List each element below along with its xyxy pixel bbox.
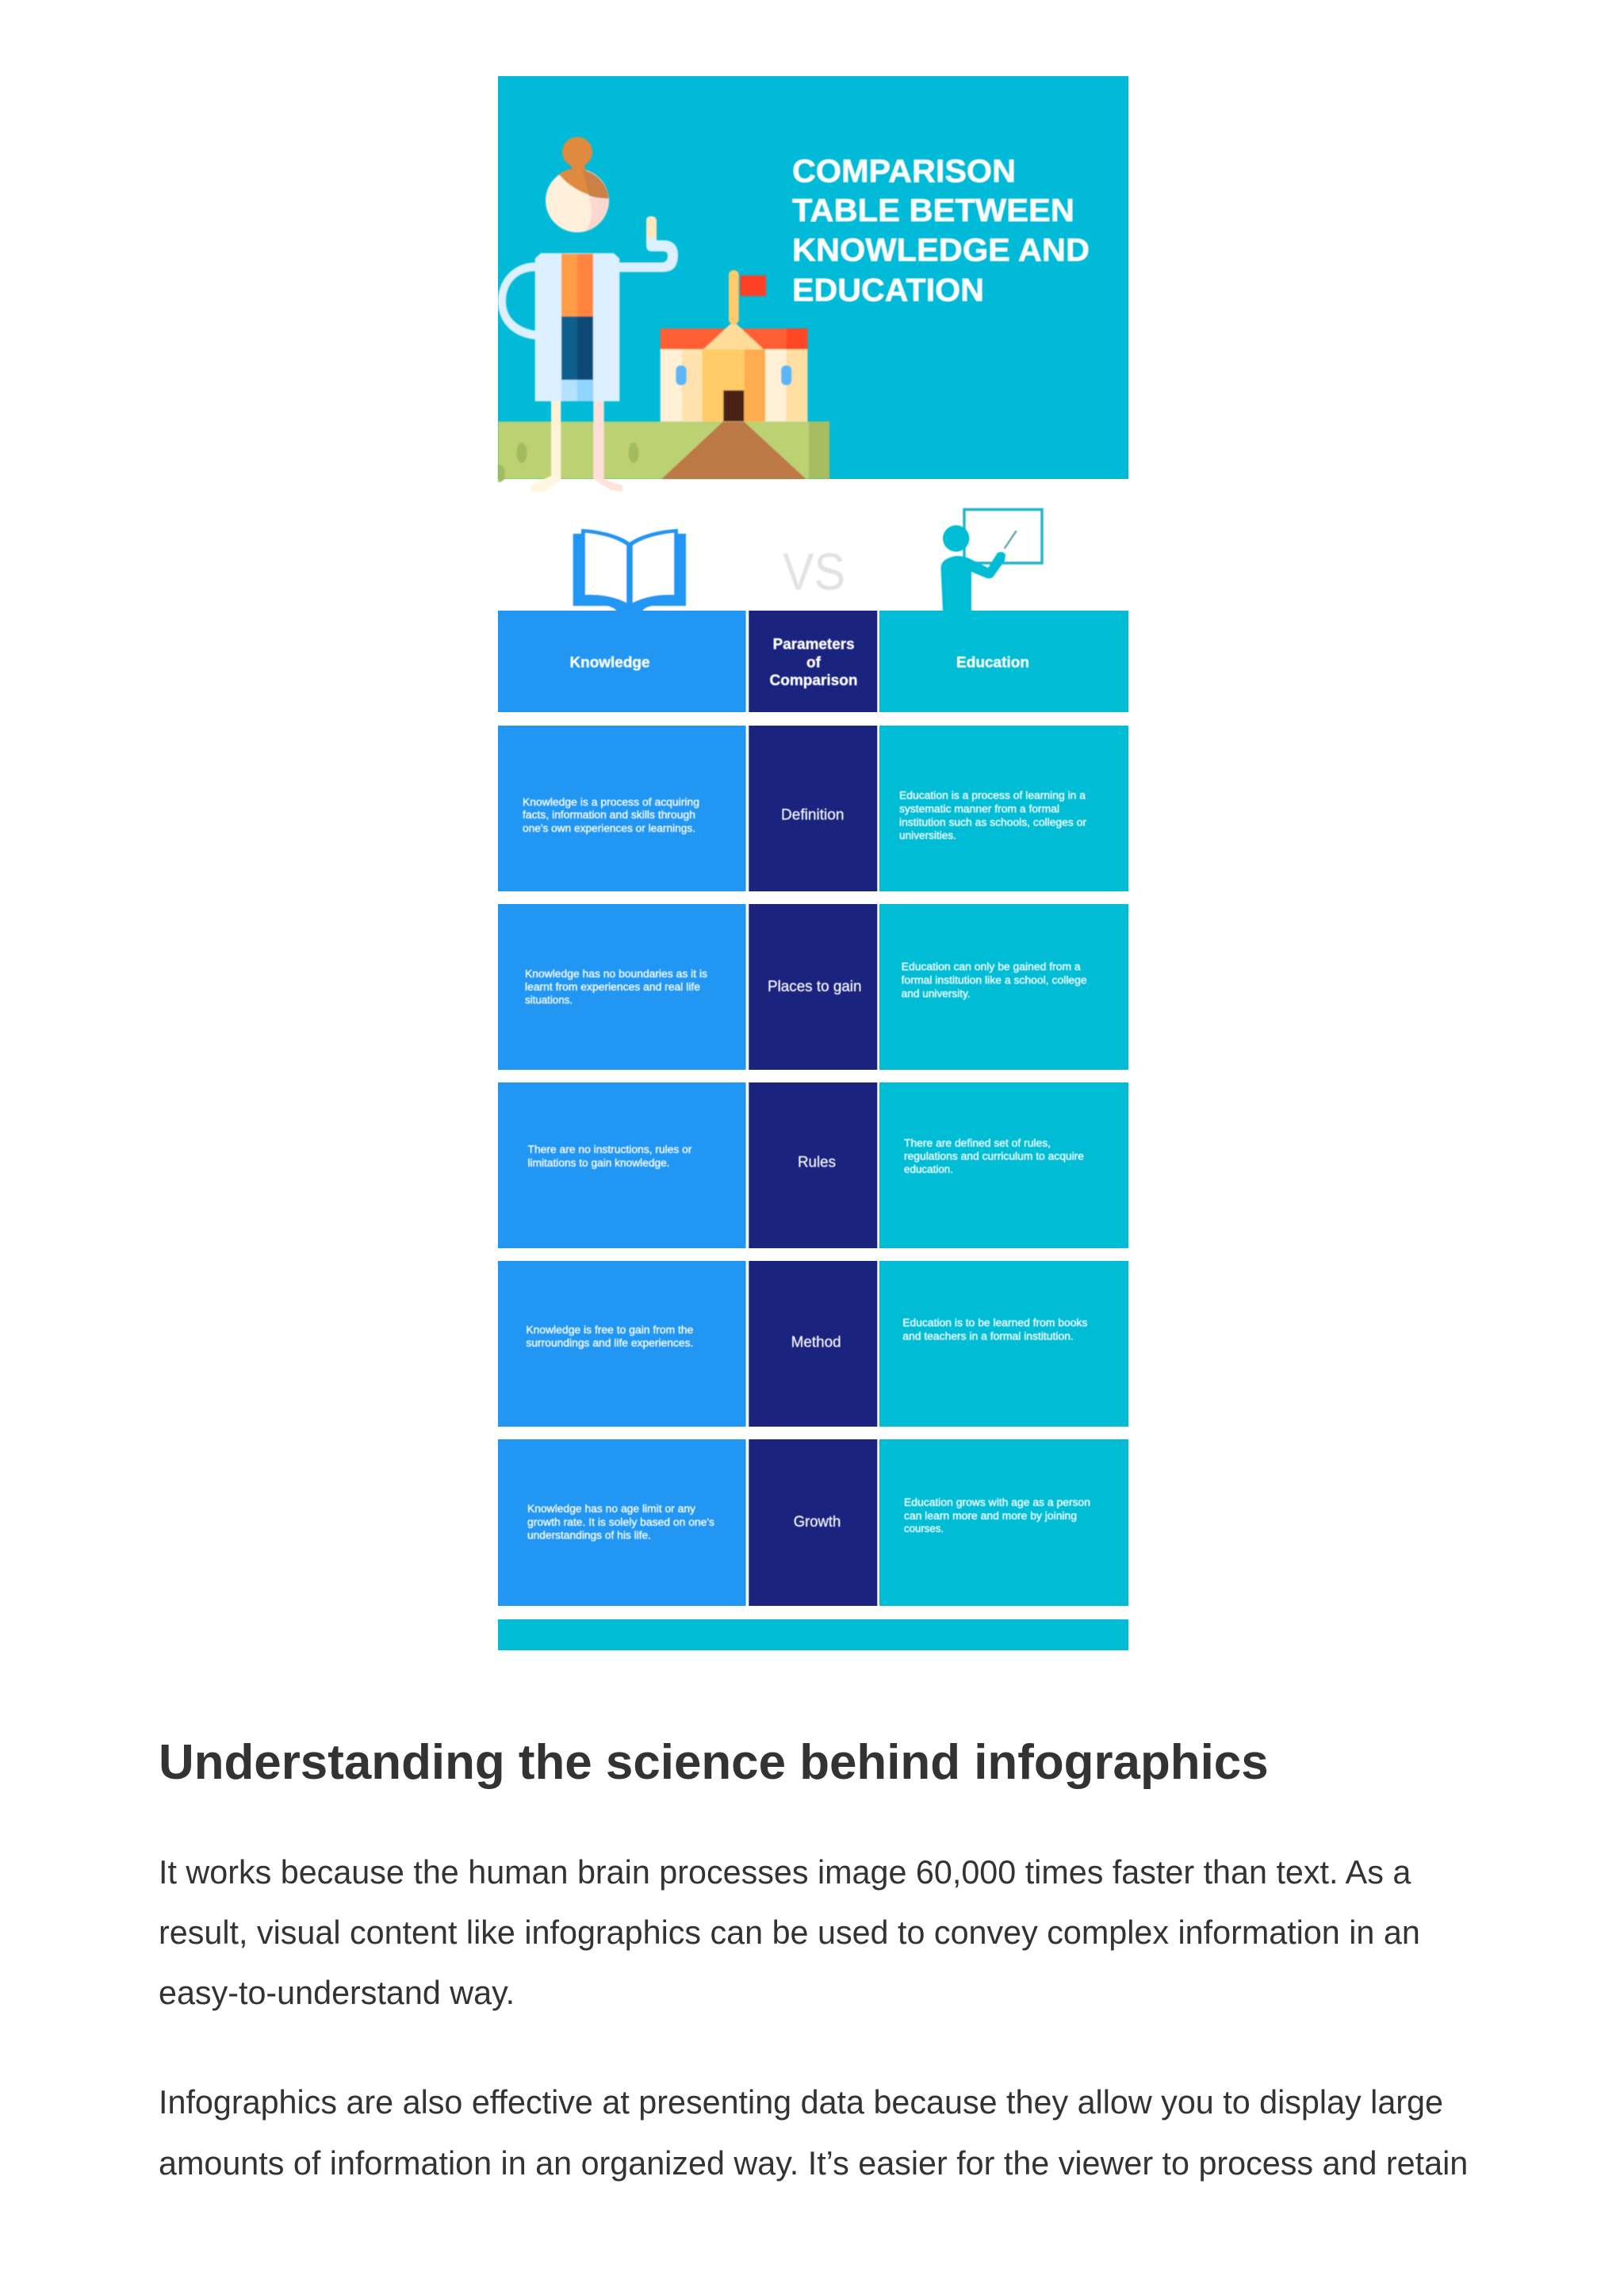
knowledge cell: facts, information and skills through <box>523 809 695 821</box>
row: Method <box>498 1261 1128 1427</box>
teacher feet below banner <box>531 476 622 492</box>
header: Education: Education <box>956 655 1029 671</box>
paragraph 2 <box>159 2084 1468 2182</box>
education cell: systematic manner from a formal <box>899 803 1059 814</box>
paragraph 1: result, visual content like infographics can be used to convey complex information in an <box>159 1914 1420 1951</box>
parameter cell <box>749 726 877 891</box>
ground <box>498 422 829 482</box>
education cell: Education is to be learned from books <box>902 1316 1088 1329</box>
knowledge cell <box>498 1082 746 1248</box>
parameter cell <box>749 1439 877 1606</box>
school building <box>661 321 807 422</box>
education cell: There are defined set of rules, <box>904 1137 1051 1149</box>
education cell: universities. <box>899 829 956 841</box>
parameter cell: Growth <box>794 1514 841 1531</box>
knowledge cell: surroundings and life experiences. <box>526 1337 693 1349</box>
education cell: Education can only be gained from a <box>902 961 1081 973</box>
education cell: courses. <box>904 1523 944 1534</box>
parameter cell <box>749 1261 877 1427</box>
title <box>792 152 1090 308</box>
paragraph 2: Infographics are also effective at presenting data because they allow you to display large <box>159 2084 1443 2121</box>
knowledge cell: growth rate. It is solely based on one's <box>527 1516 714 1528</box>
knowledge cell: one's own experiences or learnings. <box>523 822 695 834</box>
knowledge cell <box>498 1261 746 1427</box>
education cell: education. <box>904 1163 953 1175</box>
heading: Understanding the science behind infographics <box>159 1735 1269 1790</box>
title: EDUCATION <box>792 271 984 308</box>
paragraph 1 <box>159 1854 1420 2011</box>
header: Parameters of Comparison: Comparison <box>769 672 858 689</box>
parameter cell: Places to gain <box>768 979 861 995</box>
knowledge cell: Knowledge has no boundaries as it is <box>525 967 707 979</box>
row: Definition <box>498 726 1128 891</box>
paragraph 2: amounts of information in an organized way. It’s easier for the viewer to process and retain <box>159 2145 1468 2182</box>
parameter cell <box>749 904 877 1070</box>
education cell <box>879 726 1128 891</box>
row: Places to gain <box>498 904 1128 1070</box>
header: Parameters of Comparison <box>749 611 877 712</box>
header: Knowledge: Knowledge <box>569 655 650 671</box>
education cell: formal institution like a school, college <box>902 975 1087 987</box>
knowledge cell: situations. <box>525 994 573 1006</box>
parameter cell: Method <box>791 1334 841 1351</box>
header: Knowledge <box>498 611 746 712</box>
flag <box>729 270 766 324</box>
paragraph 1: It works because the human brain processes image 60,000 times faster than text. As a <box>159 1854 1411 1891</box>
icon: open book <box>573 529 686 611</box>
knowledge cell: Knowledge is free to gain from the <box>526 1324 693 1336</box>
panel: infographic hero banner <box>498 76 1128 492</box>
education cell: and university. <box>902 988 971 1000</box>
header: Parameters of Comparison: of <box>806 655 822 671</box>
paragraph 1: easy-to-understand way. <box>159 1975 515 2011</box>
header: Education <box>879 611 1128 712</box>
education cell <box>879 1439 1128 1606</box>
parameter cell: Rules <box>798 1155 836 1170</box>
label: VS: VS <box>783 542 845 601</box>
knowledge cell: learnt from experiences and real life <box>525 981 700 993</box>
knowledge cell: Knowledge is a process of acquiring <box>523 796 699 808</box>
row: Growth <box>498 1439 1128 1606</box>
knowledge cell: Knowledge has no age limit or any <box>527 1503 695 1515</box>
title: COMPARISON <box>792 152 1016 189</box>
title: KNOWLEDGE AND <box>792 232 1090 268</box>
education cell: institution such as schools, colleges or <box>899 816 1087 828</box>
education cell <box>879 1082 1128 1248</box>
education cell: and teachers in a formal institution. <box>902 1331 1074 1342</box>
teacher figure <box>498 137 678 479</box>
education cell: regulations and curriculum to acquire <box>904 1151 1084 1163</box>
title: TABLE BETWEEN <box>792 192 1074 228</box>
knowledge cell: limitations to gain knowledge. <box>528 1157 669 1169</box>
education cell: Education is a process of learning in a <box>899 790 1086 801</box>
knowledge cell <box>498 1439 746 1606</box>
education cell <box>879 1261 1128 1427</box>
row: Rules <box>498 1082 1128 1248</box>
education cell <box>879 904 1128 1070</box>
knowledge cell <box>498 904 746 1070</box>
education cell: can learn more and more by joining <box>904 1510 1077 1522</box>
illustration: ground, school and teacher <box>498 137 829 492</box>
parameter cell: Definition <box>781 807 844 823</box>
knowledge cell <box>498 726 746 891</box>
icon: teacher at board <box>940 509 1042 611</box>
header: Parameters of Comparison: Parameters <box>773 636 855 653</box>
table header row <box>498 611 1128 712</box>
footer bar <box>498 1619 1128 1650</box>
knowledge cell: There are no instructions, rules or <box>528 1144 692 1155</box>
parameter cell <box>749 1082 877 1248</box>
education cell: Education grows with age as a person <box>904 1496 1090 1508</box>
knowledge cell: understandings of his life. <box>527 1529 651 1542</box>
